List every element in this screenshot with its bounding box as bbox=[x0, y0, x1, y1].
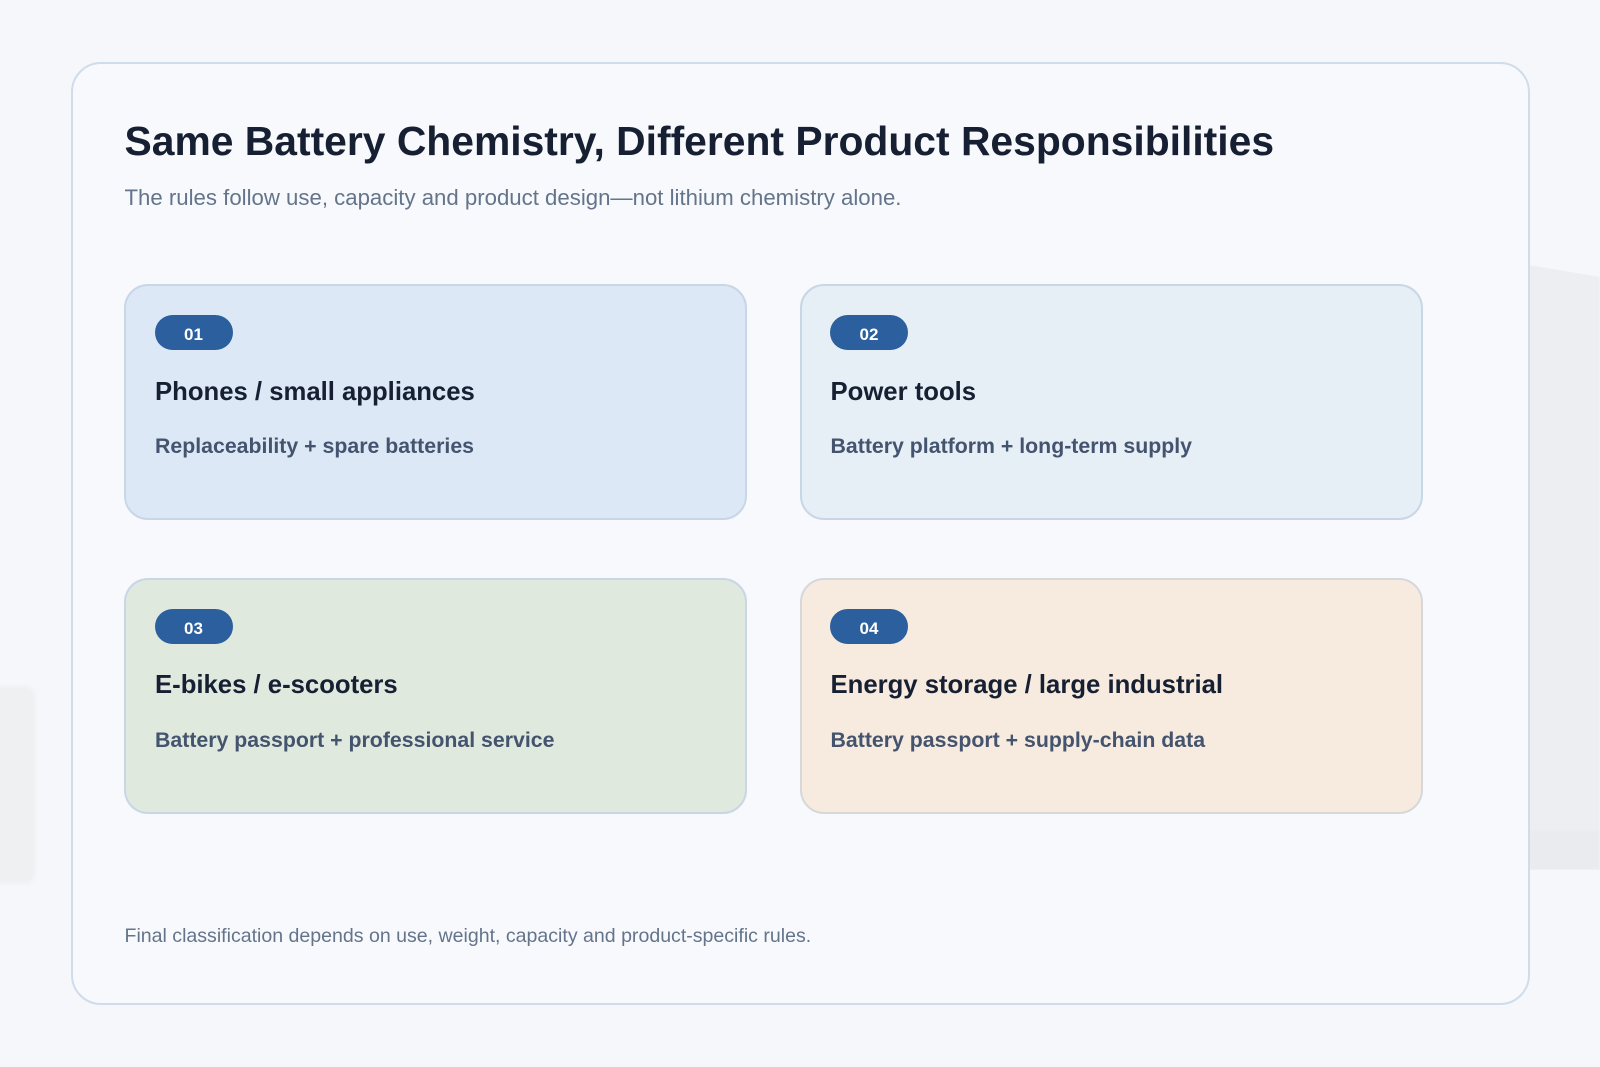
badge 02: 02 bbox=[860, 324, 878, 344]
card description: Battery passport + professional service bbox=[155, 728, 554, 752]
badge 04 bbox=[830, 608, 908, 644]
card 04: energy storage bbox=[800, 578, 1422, 814]
subtitle: The rules follow use, capacity and product design—not lithium chemistry alone. bbox=[124, 184, 901, 210]
badge 04: 04 bbox=[860, 618, 878, 638]
badge 01 bbox=[154, 314, 232, 350]
card description: Replaceability + spare batteries bbox=[155, 434, 474, 458]
card description: Battery passport + supply-chain data bbox=[830, 728, 1205, 752]
card 01: phones bbox=[124, 284, 747, 520]
badge 03 bbox=[154, 608, 232, 644]
card heading: E-bikes / e-scooters bbox=[155, 671, 398, 699]
badge 03: 03 bbox=[184, 618, 203, 638]
background shape: right bbox=[1530, 266, 1600, 870]
footnote: Final classification depends on use, weight, capacity and product-specific rules. bbox=[124, 925, 811, 947]
card 03: e-bikes bbox=[124, 578, 747, 814]
card heading: Energy storage / large industrial bbox=[830, 671, 1223, 699]
badge 01: 01 bbox=[184, 324, 203, 344]
card description: Battery platform + long-term supply bbox=[830, 434, 1192, 458]
background shape: left bbox=[0, 686, 35, 884]
badge 02 bbox=[830, 314, 908, 350]
card 02: power tools bbox=[800, 284, 1422, 520]
title: Same Battery Chemistry, Different Product Responsibilities bbox=[124, 118, 1274, 164]
card heading: Phones / small appliances bbox=[155, 378, 475, 406]
card heading: Power tools bbox=[830, 378, 976, 406]
